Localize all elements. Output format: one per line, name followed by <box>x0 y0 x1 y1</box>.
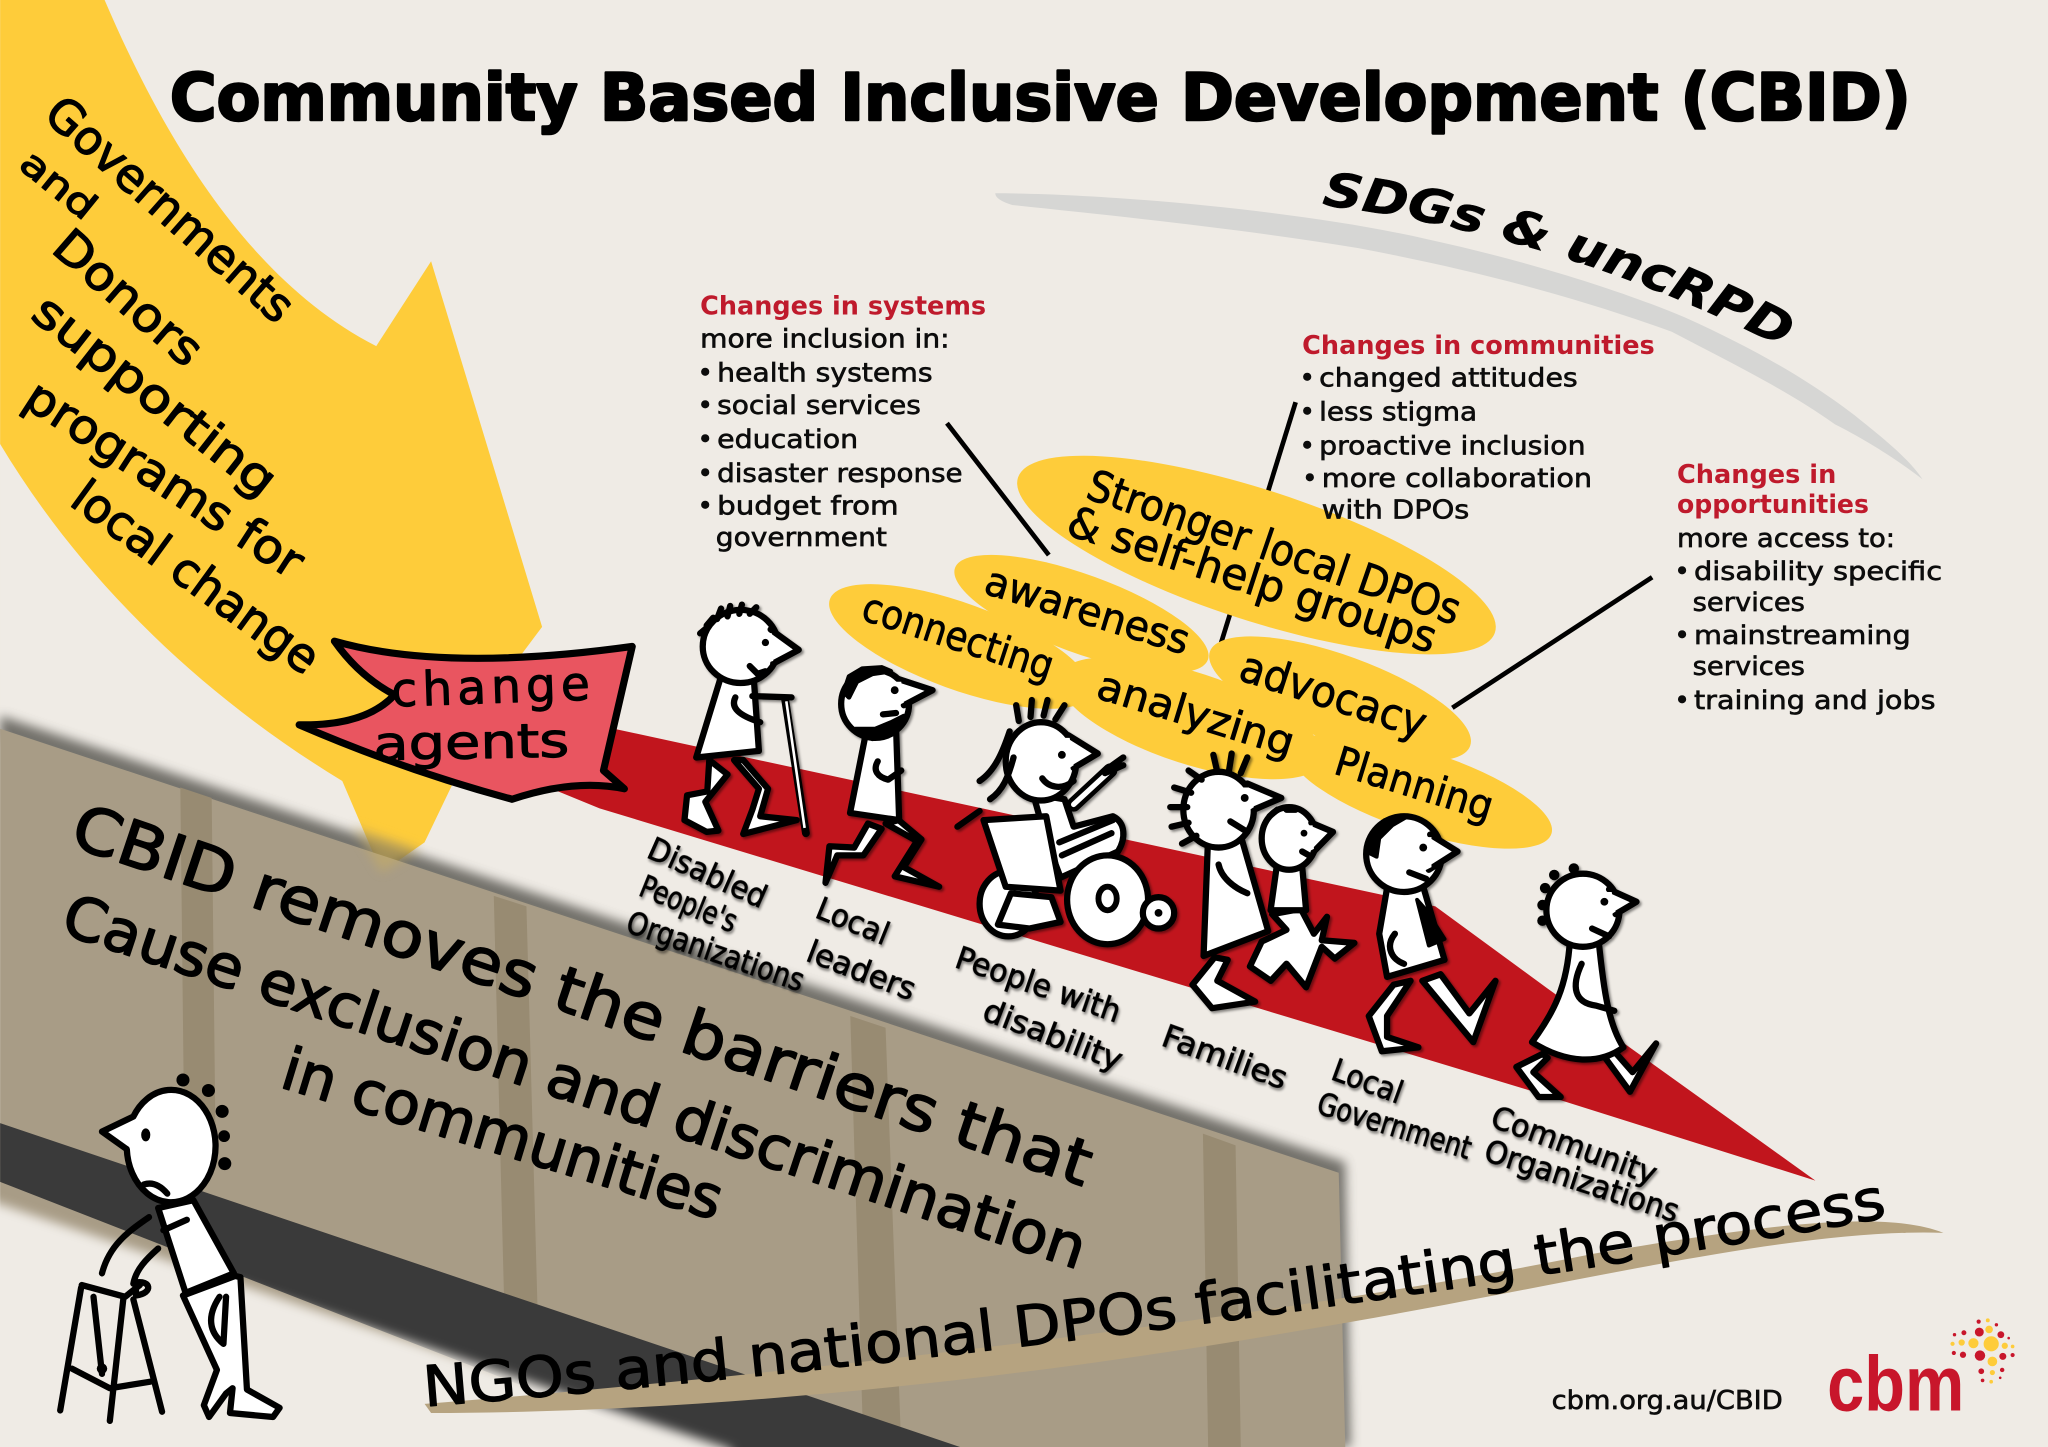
logo: cbm <box>1827 1318 2015 1427</box>
text block: changes in communities: • <box>1300 364 1315 394</box>
blob: planning: Planning <box>1329 737 1499 830</box>
text block: changes in opportunities: Changes in <box>1677 460 1836 490</box>
text: governments and donors: Donors <box>42 218 214 378</box>
text: governments and donors: supporting <box>21 283 288 509</box>
labels: participant groups: People's <box>634 869 742 940</box>
labels: participant groups: Organizations <box>622 905 809 999</box>
text block: changes in communities: proactive inclusion <box>1319 431 1586 461</box>
yellow arrow: governments and donors <box>0 0 542 872</box>
heading: title: Community Based Inclusive Development (CBID) <box>170 60 1911 136</box>
figure: local leader <box>825 667 939 887</box>
blob: advocacy <box>1195 611 1485 787</box>
wall stripes <box>180 787 1241 1447</box>
text block: changes in communities: • <box>1302 464 1318 494</box>
arc swoosh: SDGs and UNCRPD <box>995 193 1922 479</box>
text block: changes in opportunities: training and jobs <box>1694 686 1936 716</box>
background below wall <box>0 1186 731 1447</box>
wall text: CBID removes barriers: Cause exclusion and discrimination <box>55 880 1095 1283</box>
blob: awareness: awareness <box>979 557 1196 664</box>
figure: local government official <box>1366 816 1495 1051</box>
blob: stronger local DPOs: Stronger local DPOs <box>1080 461 1467 636</box>
text block: changes in communities: more collaboration <box>1322 464 1592 494</box>
text: governments and donors: local change <box>61 469 330 686</box>
blob: stronger local DPOs: & self-help groups <box>1061 497 1443 664</box>
text block: changes in systems <box>698 292 986 553</box>
text block: changes in systems: • <box>698 425 713 455</box>
text block: changes in communities: less stigma <box>1319 398 1477 428</box>
text block: changes in opportunities: opportunities <box>1677 490 1869 520</box>
blob: awareness <box>942 531 1221 697</box>
labels: participant groups: Families <box>1157 1018 1292 1097</box>
labels: participant groups: Local <box>1327 1052 1408 1111</box>
labels: participant groups: Community <box>1486 1099 1662 1193</box>
labels: participant groups: Government <box>1313 1086 1476 1167</box>
text block: changes in systems: Changes in systems <box>700 292 986 322</box>
text block: changes in systems: budget from <box>717 492 899 522</box>
text block: changes in systems: education <box>717 425 858 455</box>
text block: changes in communities <box>1300 331 1655 525</box>
labels: participant groups <box>622 831 1684 1230</box>
labels: participant groups: leaders <box>802 934 921 1008</box>
figure: community organization member <box>1516 863 1656 1097</box>
url: cbm.org.au/CBID <box>1552 1386 1783 1416</box>
text block: changes in communities: • <box>1300 431 1315 461</box>
labels: participant groups: People with <box>951 940 1126 1030</box>
labels: participant groups: Organizations <box>1480 1133 1684 1230</box>
wall text: CBID removes barriers: CBID removes the barriers that <box>63 790 1101 1201</box>
text block: changes in opportunities: more access to: <box>1677 524 1895 554</box>
text block: changes in communities: with DPOs <box>1322 495 1469 525</box>
text block: changes in opportunities: • <box>1674 621 1690 651</box>
text block: changes in communities: Changes in communities <box>1302 331 1655 361</box>
text block: changes in opportunities: • <box>1674 557 1690 587</box>
text block: changes in opportunities: services <box>1693 652 1805 682</box>
text block: changes in opportunities: services <box>1693 588 1805 618</box>
dark shadow band under wall <box>0 1123 960 1447</box>
text block: changes in systems: social services <box>717 391 921 421</box>
text: NGOs and national DPOs facilitating the process: NGOs and national DPOs facilitating the process <box>426 1188 1884 1407</box>
text block: changes in opportunities: mainstreaming <box>1694 621 1911 651</box>
labels: participant groups: disability <box>978 993 1127 1079</box>
text block: changes in opportunities <box>1674 460 1942 716</box>
text: SDGs and UNCRPD: SDGs & uncRPD <box>1322 172 1792 340</box>
logo: cbm: cbm <box>1827 1339 1964 1427</box>
text: governments and donors: and <box>11 141 105 228</box>
blob: connecting: connecting <box>856 583 1060 690</box>
ribbon: NGOs and national DPOs <box>425 1221 1943 1413</box>
banner: change agents: change <box>390 657 591 719</box>
figure: disabled person with cane <box>684 605 806 834</box>
blob: stronger local DPOs <box>998 415 1515 695</box>
text: governments and donors <box>11 85 330 686</box>
blob: analyzing <box>1045 632 1337 805</box>
text block: changes in systems: • <box>698 391 713 421</box>
text block: changes in systems: • <box>698 459 713 489</box>
banner: change agents <box>299 641 632 799</box>
figure: person with disability in wheelchair <box>957 700 1174 944</box>
text: governments and donors: programs for <box>14 369 314 590</box>
text block: changes in opportunities: • <box>1674 686 1690 716</box>
banner: change agents: agents <box>373 714 570 772</box>
red path <box>549 729 1815 1181</box>
wall: barriers <box>0 729 1345 1447</box>
text block: changes in communities: changed attitudes <box>1319 364 1578 394</box>
text: governments and donors: Governments <box>34 85 305 334</box>
figure: excluded person with walker <box>60 1073 280 1421</box>
labels: participant groups: Disabled <box>642 831 772 916</box>
text block: changes in systems: more inclusion in: <box>700 324 950 354</box>
blob: analyzing: analyzing <box>1092 661 1300 767</box>
connector lines <box>947 402 1652 708</box>
yellow arrow tip fading into wall <box>353 825 421 872</box>
labels: participant groups: Local <box>811 891 894 953</box>
text block: changes in communities: • <box>1300 398 1315 428</box>
text block: changes in systems: • <box>698 492 713 522</box>
text block: changes in systems: government <box>716 523 887 553</box>
text block: changes in opportunities: disability specific <box>1694 557 1942 587</box>
text block: changes in systems: disaster response <box>717 459 963 489</box>
blob: advocacy: advocacy <box>1233 642 1433 749</box>
figure: family, adult and child <box>1170 754 1354 1008</box>
blob: connecting <box>815 559 1105 734</box>
wall text: CBID removes barriers: in communities <box>274 1034 731 1234</box>
blob: planning <box>1278 711 1564 872</box>
wall shadow <box>0 716 1350 1447</box>
text block: changes in systems: health systems <box>717 358 933 388</box>
text block: changes in systems: • <box>698 358 713 388</box>
